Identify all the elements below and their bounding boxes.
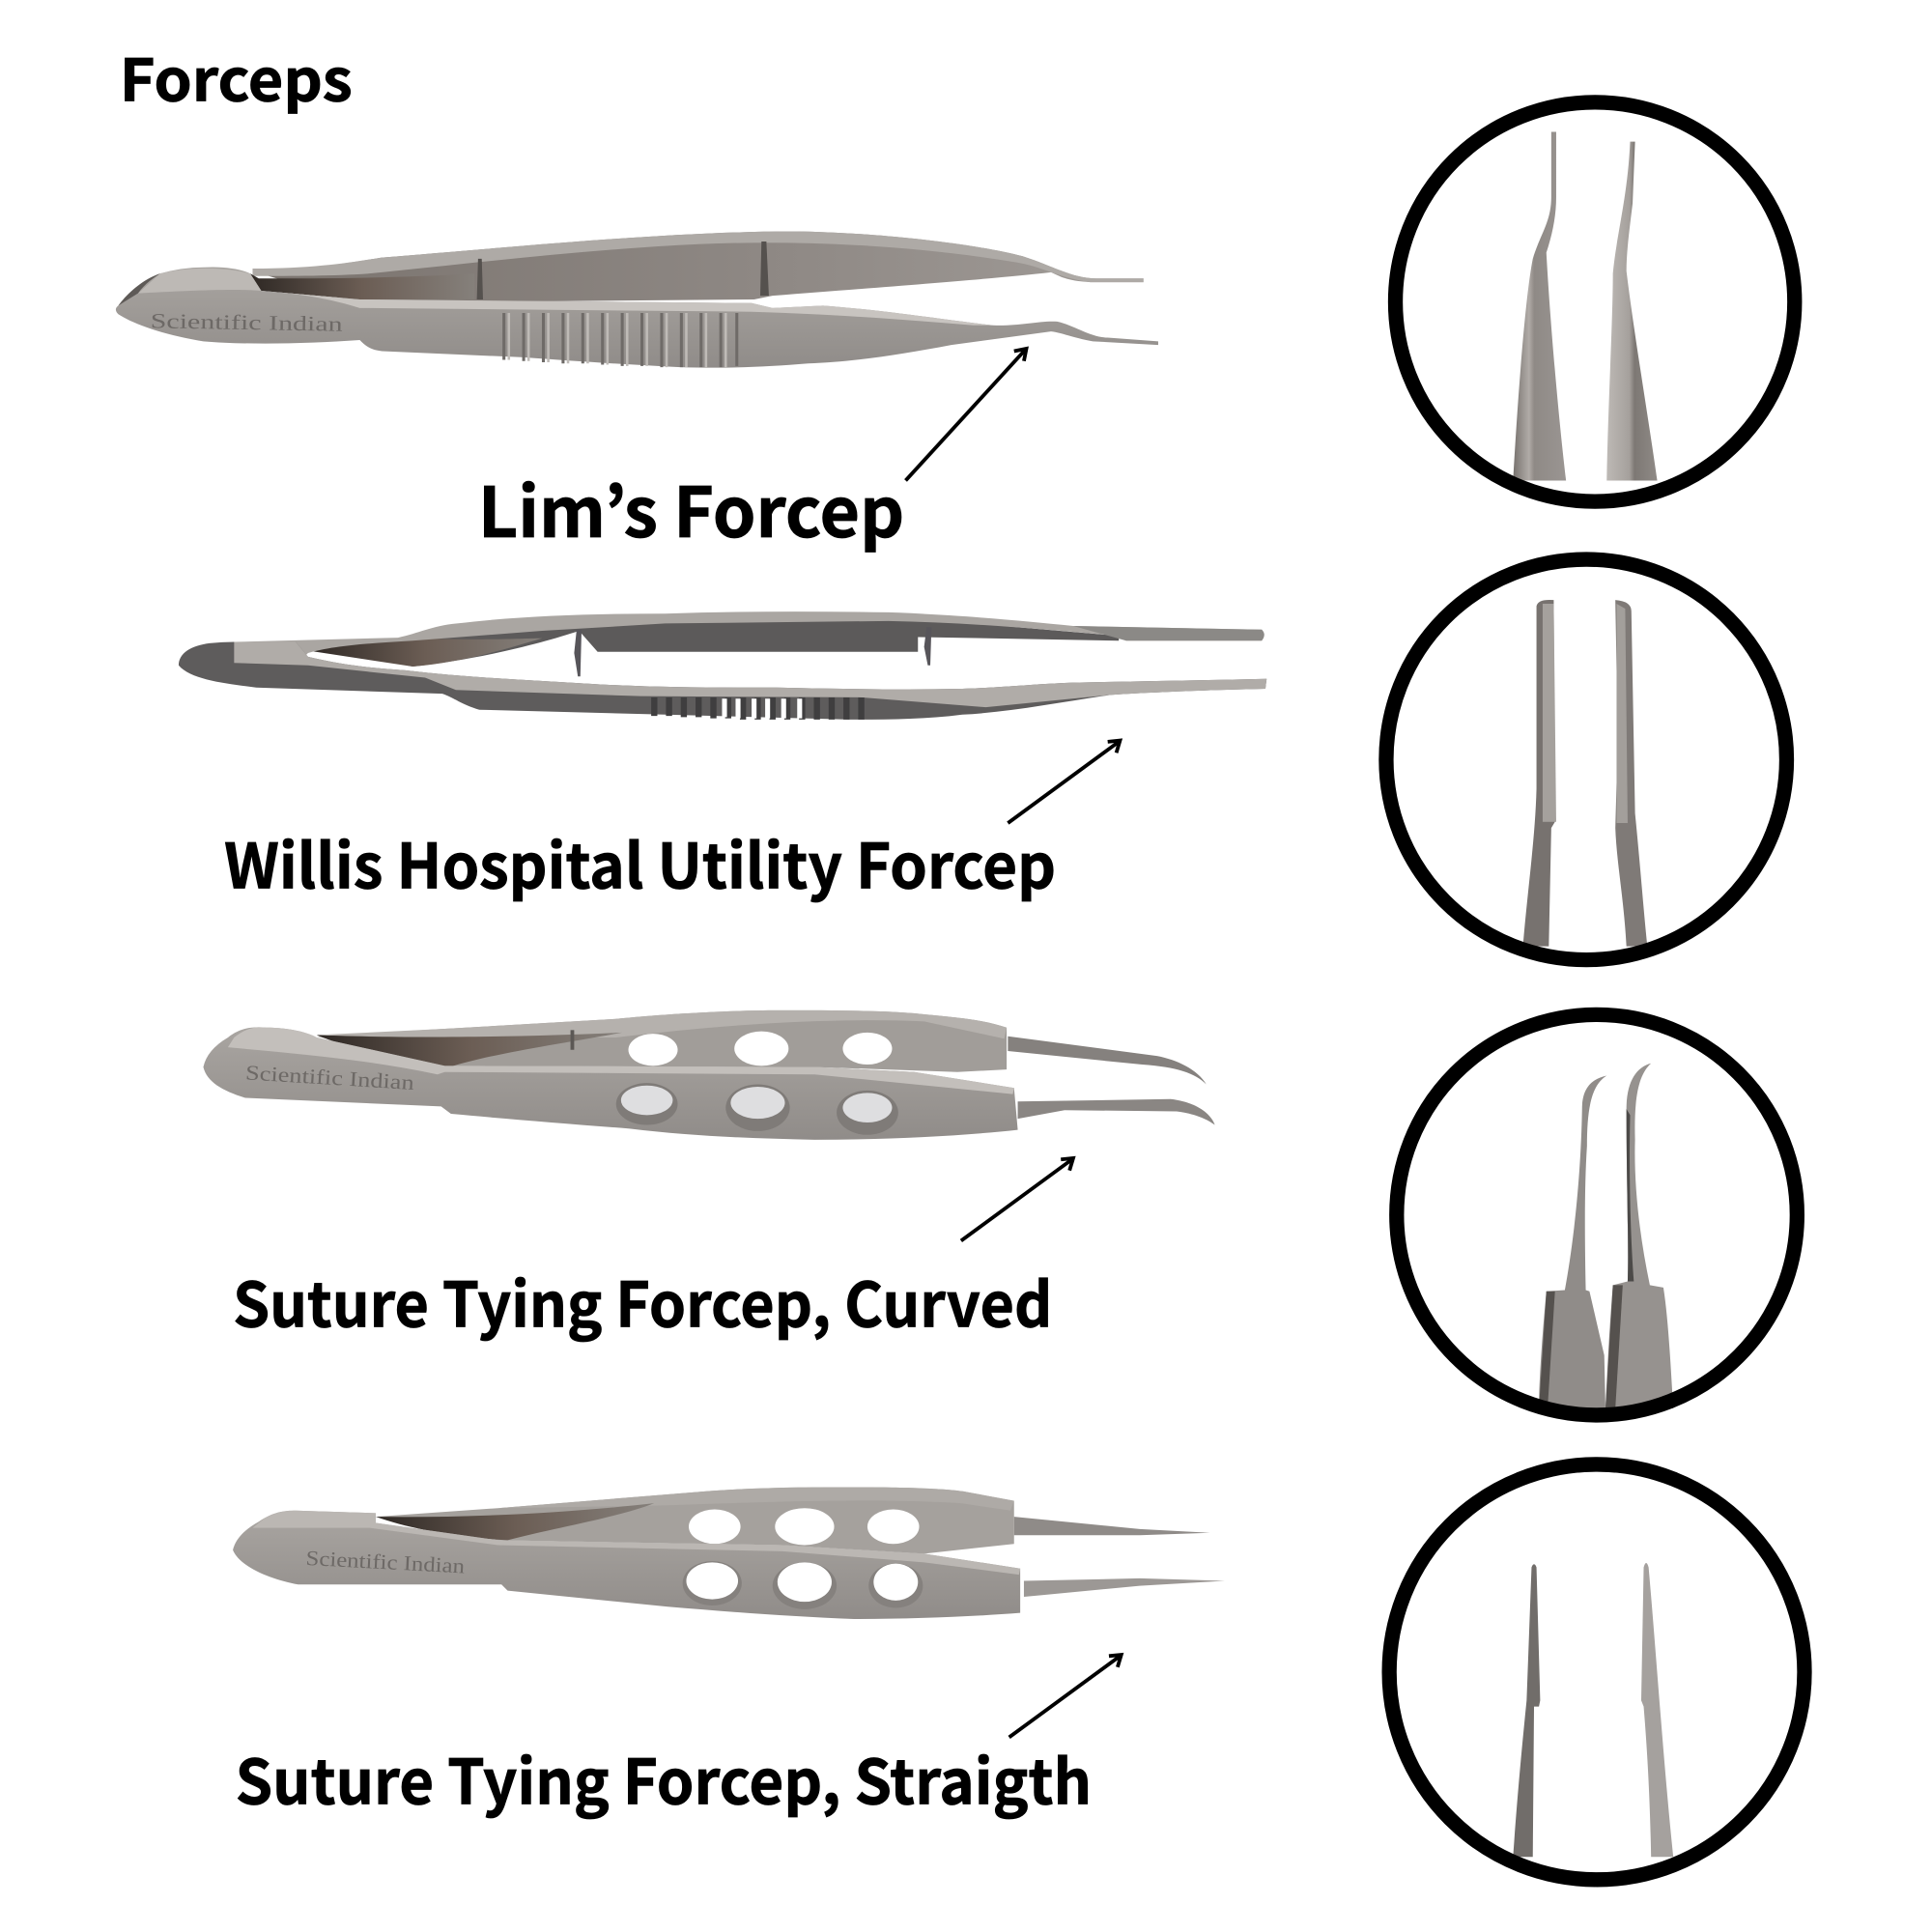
upper arm panel — [308, 616, 1119, 667]
upper arm ridge — [234, 611, 1264, 666]
pins — [574, 630, 582, 676]
back tip — [1014, 1517, 1210, 1535]
back arm — [376, 1488, 1014, 1553]
arrow: Suture Tying Forcep, Straight — [1009, 1655, 1122, 1737]
serrations — [504, 313, 737, 367]
detail circle: Curved tips — [1397, 1014, 1797, 1415]
detail circle: Lim's tips — [1396, 102, 1795, 501]
front arm — [116, 267, 1158, 368]
front holes — [683, 1561, 742, 1605]
back arm tip — [1008, 1037, 1207, 1084]
arrow: Suture Tying Forcep, Curved — [961, 1158, 1073, 1240]
engraving: Scientific Indian — [245, 1061, 415, 1094]
front holes — [616, 1083, 678, 1125]
label: Willis Hospital Utility Forcep: Willis Hospital Utility Forcep — [224, 818, 1056, 907]
forcep photo: Lim's Forcep — [116, 231, 1158, 368]
detail circle: Willis tips — [1386, 559, 1786, 960]
engraving: Scientific Indian — [305, 1547, 466, 1578]
arrow: Willis Hospital Utility Forcep — [1008, 741, 1120, 823]
front arm — [233, 1511, 1020, 1619]
front tip — [1018, 1099, 1215, 1125]
front tip — [1024, 1578, 1225, 1597]
forcep photo: Suture Tying Forcep, Curved — [203, 1010, 1215, 1140]
back arm — [317, 1010, 1007, 1072]
front arm — [203, 1027, 1018, 1140]
forcep photo: Willis Hospital Utility Forcep — [179, 611, 1266, 720]
engraving: Scientific Indian — [151, 309, 343, 336]
label: Suture Tying Forcep, Straigth: Suture Tying Forcep, Straigth — [236, 1733, 1092, 1822]
label: Lim's Forcep: Lim’s Forcep — [478, 457, 904, 557]
pins — [477, 259, 483, 299]
forcep photo: Suture Tying Forcep, Straight — [233, 1488, 1225, 1619]
lower arm — [179, 642, 1266, 720]
back holes — [629, 1034, 678, 1065]
arrow: Lim's Forcep — [906, 349, 1026, 480]
title: Forceps — [120, 35, 353, 119]
detail circle: Straight tips — [1389, 1464, 1804, 1880]
back arm — [252, 231, 1144, 303]
serrations — [654, 697, 862, 720]
label: Suture Tying Forcep, Curved: Suture Tying Forcep, Curved — [233, 1257, 1052, 1346]
back holes — [689, 1509, 741, 1544]
